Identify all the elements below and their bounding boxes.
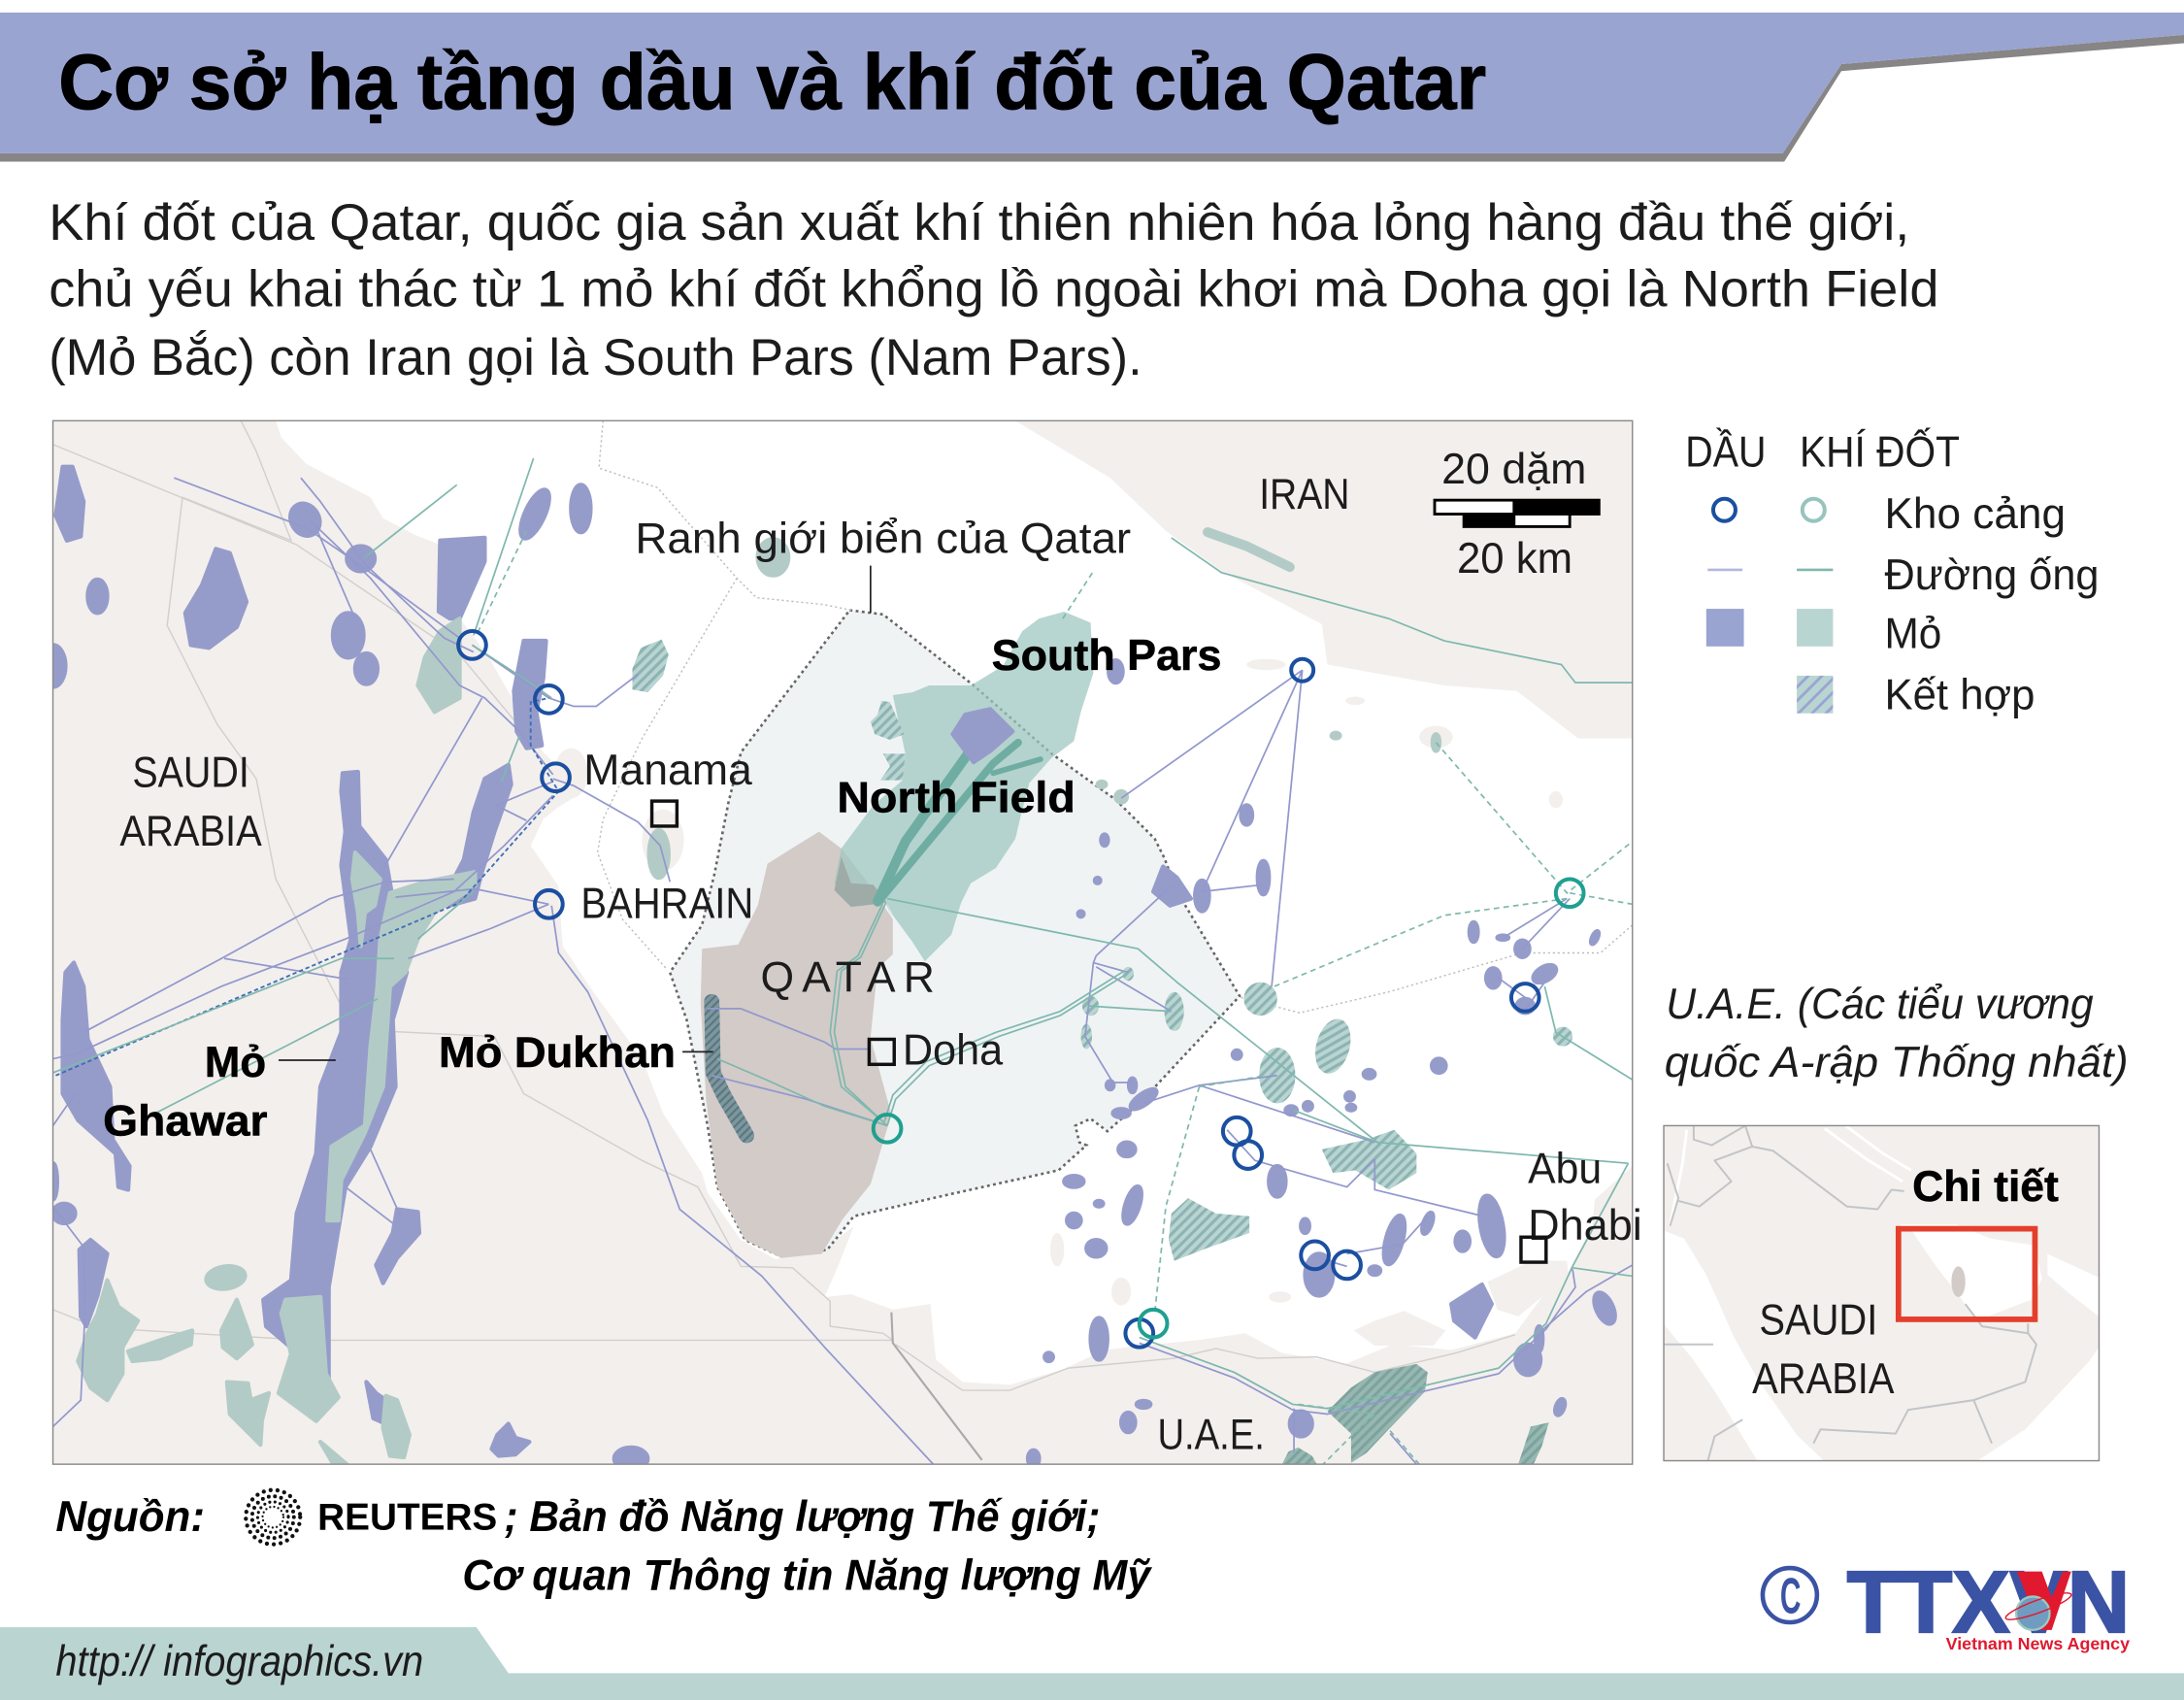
source credit: Cơ quan Thông tin Năng lượng Mỹ <box>462 1551 1152 1599</box>
label: Qatar: QATAR <box>760 954 935 1002</box>
label: Manama: Manama <box>583 747 752 794</box>
South Pars / North Field gas field <box>835 612 1093 961</box>
Reuters wordmark: REUTERS <box>317 1497 497 1539</box>
label: Abu Dhabi: Abu <box>1528 1145 1602 1192</box>
land: Saudi Arabia and U.A.E. <box>53 420 1633 1466</box>
footer band <box>0 1627 2184 1700</box>
inset label: Saudi Arabia: ARABIA <box>1752 1355 1895 1403</box>
icon: Reuters logo <box>246 1490 300 1545</box>
label: Saudi Arabia: ARABIA <box>119 808 262 855</box>
inset: red detail box <box>1899 1229 2035 1319</box>
label: North Field: North Field <box>837 775 1075 822</box>
panel: main map <box>41 420 1642 1470</box>
label: Doha: Doha <box>903 1026 1003 1074</box>
label: U.A.E.: U.A.E. <box>1157 1411 1265 1458</box>
land: Iran <box>1015 420 1633 739</box>
gas fields <box>78 532 1439 1466</box>
inset seas <box>1663 1125 2099 1461</box>
legend: combined: Kết hợp <box>1884 671 2035 718</box>
oil port markers <box>458 631 1539 1348</box>
legend <box>1685 427 2099 718</box>
label: Dukhan field: Mỏ Dukhan <box>439 1029 676 1077</box>
label: Saudi Arabia <box>119 750 262 855</box>
label: Manama <box>583 747 752 826</box>
inset borders <box>1663 1125 2036 1461</box>
map frame <box>53 420 1633 1464</box>
gas pipelines <box>53 458 1633 1466</box>
legend: DẦU <box>1685 428 1767 477</box>
agency name: Vietnam News Agency <box>1946 1634 2130 1653</box>
legend: ports <box>1713 490 2066 538</box>
field overlap on Qatar coast <box>835 857 893 919</box>
coastal islands and shallows <box>554 659 1569 1346</box>
combined oil and gas fields <box>632 640 1572 1466</box>
header banner <box>0 13 2184 161</box>
intro text: (Mỏ Bắc) còn Iran gọi là South Pars (Nam Pars). <box>49 329 1142 386</box>
label: South Pars: South Pars <box>992 632 1221 680</box>
scale bar: 20 dặm <box>1441 446 1586 493</box>
legend: KHÍ ĐỐT <box>1800 427 1960 477</box>
legend: combined <box>1797 671 2035 718</box>
sea borders and land borders <box>53 420 1633 1460</box>
North Field offshore gas pipelines <box>877 743 1041 903</box>
inset frame <box>1664 1125 2099 1461</box>
inset label: detail: Chi tiết <box>1912 1163 2059 1211</box>
Qatar maritime boundary zone <box>670 611 1240 1256</box>
label: Iran: IRAN <box>1259 471 1349 518</box>
inset caption: U.A.E.: quốc A-rập Thống nhất) <box>1665 1039 2129 1086</box>
title: Cơ sở hạ tầng dầu và khí đốt của Qatar <box>58 39 1486 126</box>
label: Ghawar field <box>103 1039 336 1145</box>
TTXVN logo <box>1763 1553 2130 1653</box>
inset caption: U.A.E. <box>1665 981 2129 1086</box>
intro text <box>49 194 1938 386</box>
legend: pipelines: Đường ống <box>1884 551 2099 599</box>
maritime boundary leader <box>870 566 872 613</box>
legend: fields <box>1706 609 1941 657</box>
label: Bahrain: BAHRAIN <box>580 881 753 928</box>
oil pipelines <box>53 478 1633 1464</box>
intro text: Khí đốt của Qatar, quốc gia sản xuất khí thiên nhiên hóa lỏng hàng đầu thế giới, <box>49 194 1909 251</box>
inset caption: U.A.E.: U.A.E. (Các tiểu vương <box>1666 981 2094 1028</box>
label: maritime boundary: Ranh giới biển của Qatar <box>635 516 1131 563</box>
oil fields <box>41 467 1619 1470</box>
label: Ghawar field: Mỏ <box>205 1039 266 1086</box>
label: Abu Dhabi <box>1521 1145 1642 1262</box>
copyright mark <box>1763 1568 1817 1624</box>
copyright mark: C <box>1780 1568 1801 1624</box>
source credit <box>55 1490 1152 1599</box>
label: Ghawar field: Ghawar <box>103 1097 268 1145</box>
footer URL: http:// infographics.vn <box>55 1638 423 1685</box>
legend: fields: Mỏ <box>1884 610 1941 657</box>
scale bar <box>1434 446 1601 583</box>
red V stroke <box>2017 1572 2071 1630</box>
globe <box>2003 1588 2073 1630</box>
inset label: Saudi Arabia <box>1752 1297 1895 1403</box>
source credit: ; Bản đồ Năng lượng Thế giới; <box>504 1493 1101 1541</box>
source credit: Nguồn: <box>55 1493 205 1541</box>
gas port markers <box>874 879 1584 1338</box>
agency wordmark: TTXVN <box>1847 1553 2130 1651</box>
label: Abu Dhabi: Dhabi <box>1528 1202 1642 1250</box>
scale bar: 20 km <box>1457 535 1572 583</box>
land: Qatar <box>701 832 893 1258</box>
panel: inset locator map <box>1663 1125 2099 1461</box>
intro text: chủ yếu khai thác từ 1 mỏ khí đốt khổng lồ ngoài khơi mà Doha gọi là North Field <box>49 261 1938 318</box>
label: Saudi Arabia: SAUDI <box>132 750 249 797</box>
inset label: Saudi Arabia: SAUDI <box>1759 1297 1877 1345</box>
inset: Qatar <box>1951 1266 1966 1297</box>
legend: ports: Kho cảng <box>1884 490 2066 538</box>
